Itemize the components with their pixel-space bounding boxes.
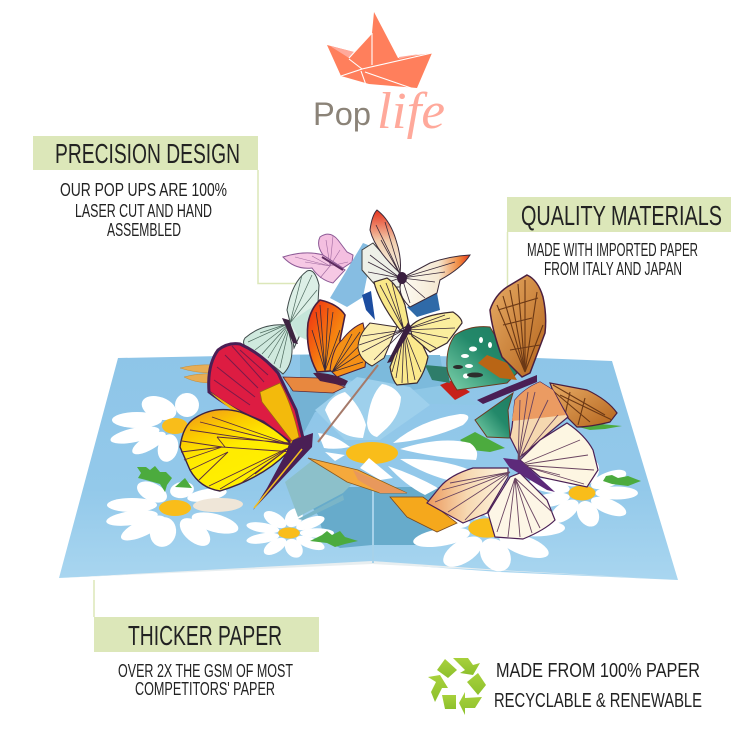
heading: THICKER PAPER (128, 620, 282, 651)
heading bar (507, 197, 731, 232)
logo wordmark: Pop (313, 96, 371, 132)
butterfly: side wings (308, 458, 457, 532)
logo: Poplife (313, 12, 445, 140)
body text: COMPETITORS' PAPER (135, 679, 275, 699)
butterfly: orange flame (283, 300, 366, 393)
butterfly: cream yellow (358, 278, 462, 385)
body text: OUR POP UPS ARE 100% (60, 180, 227, 200)
butterfly: pale green (244, 271, 319, 374)
body text (118, 661, 293, 699)
thin stem (318, 365, 378, 442)
callout: made from 100% paper: MADE FROM 100% PAPER (496, 660, 700, 682)
flower: small (244, 508, 334, 558)
callout: quality materials (507, 197, 731, 279)
heading bar (33, 136, 258, 170)
body text: OVER 2X THE GSM OF MOST (118, 661, 293, 681)
flower: centre (318, 414, 477, 495)
callout: made from 100% paper (494, 660, 702, 712)
card base (59, 354, 678, 580)
paper pop-up: base (315, 377, 430, 440)
flower: right (526, 458, 638, 528)
callout: thicker paper (94, 617, 319, 699)
flower: large left (105, 477, 243, 551)
connector: thicker paper (93, 580, 95, 617)
body text: LASER CUT AND HAND (75, 201, 212, 221)
butterfly: pink (283, 234, 353, 283)
callout: precision design (33, 136, 258, 240)
logo wordmark (313, 83, 445, 140)
body text: ASSEMBLED (107, 220, 181, 240)
connector: precision design (258, 170, 297, 284)
upper band shadow (290, 380, 340, 440)
heading: PRECISION DESIGN (55, 138, 240, 169)
butterfly: red and white (362, 210, 470, 320)
butterfly: peach and cream (427, 382, 598, 539)
logo wordmark: life (377, 83, 445, 140)
tan paper tabs (180, 365, 215, 383)
lower fold shadow (296, 487, 470, 548)
pop-up card (59, 210, 678, 580)
body text (60, 180, 227, 240)
heading bar (94, 617, 319, 652)
icon: recycle (428, 658, 486, 715)
blue paper piece (330, 243, 373, 307)
leaves (137, 423, 641, 547)
flower: top left (109, 389, 203, 464)
body text (527, 240, 698, 279)
butterfly: red and yellow (180, 344, 313, 510)
paper pop-up: right petal (367, 384, 401, 437)
icon: origami boat (327, 12, 432, 89)
paper pop-up: left petal (325, 392, 366, 438)
connector: quality materials (506, 232, 508, 292)
butterfly: orange and green (425, 275, 617, 438)
flower: bottom (409, 483, 565, 573)
paper pop-up: triangle (285, 460, 353, 517)
